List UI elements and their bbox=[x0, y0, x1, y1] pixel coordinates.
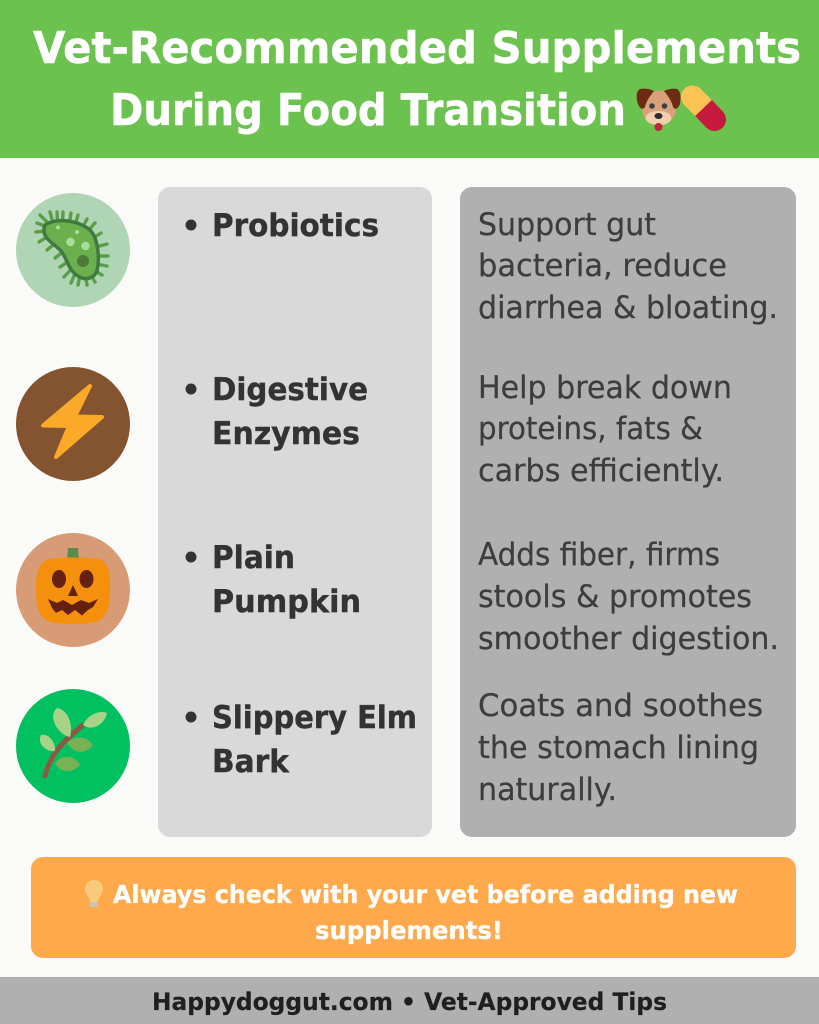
title bbox=[33, 23, 801, 136]
text: slippery elm benefit: the stomach lining bbox=[478, 730, 759, 766]
text: enzymes benefit: carbs efficiently. bbox=[478, 453, 724, 489]
icon: pill capsule bbox=[692, 97, 726, 131]
text: enzymes benefit: Help break down bbox=[478, 370, 732, 406]
title: Vet-Recommended Supplements bbox=[33, 23, 801, 74]
text: slippery elm benefit: Coats and soothes bbox=[478, 688, 763, 724]
footer bbox=[0, 977, 819, 1024]
item: digestive enzymes bbox=[186, 372, 368, 452]
header banner bbox=[0, 0, 819, 158]
item: slippery elm bark: Slippery Elm bbox=[212, 700, 417, 736]
text: probiotics benefit: Support gut bbox=[478, 207, 656, 243]
item: slippery elm bark bbox=[186, 700, 417, 780]
callout: vet advice bbox=[31, 857, 796, 958]
item: plain pumpkin: Plain bbox=[212, 540, 295, 576]
callout text bbox=[113, 880, 738, 945]
panel: supplement benefits bbox=[460, 187, 796, 837]
icon: dog face bbox=[637, 89, 681, 131]
text: probiotics benefit: diarrhea & bloating. bbox=[478, 290, 778, 326]
text: pumpkin benefit: Adds fiber, firms bbox=[478, 537, 720, 573]
callout text: supplements! bbox=[315, 916, 503, 945]
item: plain pumpkin bbox=[186, 540, 361, 620]
text: pumpkin benefit: stools & promotes bbox=[478, 579, 752, 615]
item: plain pumpkin: Pumpkin bbox=[212, 584, 361, 620]
text: slippery elm benefit bbox=[478, 688, 763, 808]
title: During Food Transition bbox=[110, 85, 626, 136]
text: pumpkin benefit: smoother digestion. bbox=[478, 621, 779, 657]
text: enzymes benefit bbox=[478, 370, 732, 489]
text: probiotics benefit: bacteria, reduce bbox=[478, 248, 727, 284]
icon: microbe in green circle bbox=[16, 193, 130, 307]
icon: lightning bolt in brown circle bbox=[16, 367, 130, 481]
item: digestive enzymes: Enzymes bbox=[212, 416, 360, 452]
icon: pumpkin in tan circle bbox=[16, 533, 130, 647]
text: enzymes benefit: proteins, fats & bbox=[478, 411, 703, 447]
item: probiotics: Probiotics bbox=[212, 208, 379, 244]
text: probiotics benefit bbox=[478, 207, 778, 326]
icon: light bulb bbox=[85, 880, 103, 907]
item: slippery elm bark: Bark bbox=[212, 744, 290, 780]
text: pumpkin benefit bbox=[478, 537, 779, 657]
callout text: Always check with your vet before adding new bbox=[113, 880, 738, 909]
icon: herb branch in green circle bbox=[16, 689, 130, 803]
panel: supplement names bbox=[158, 187, 432, 837]
footer: Happydoggut.com • Vet-Approved Tips bbox=[152, 988, 667, 1016]
item: digestive enzymes: Digestive bbox=[212, 372, 368, 408]
text: slippery elm benefit: naturally. bbox=[478, 772, 617, 808]
